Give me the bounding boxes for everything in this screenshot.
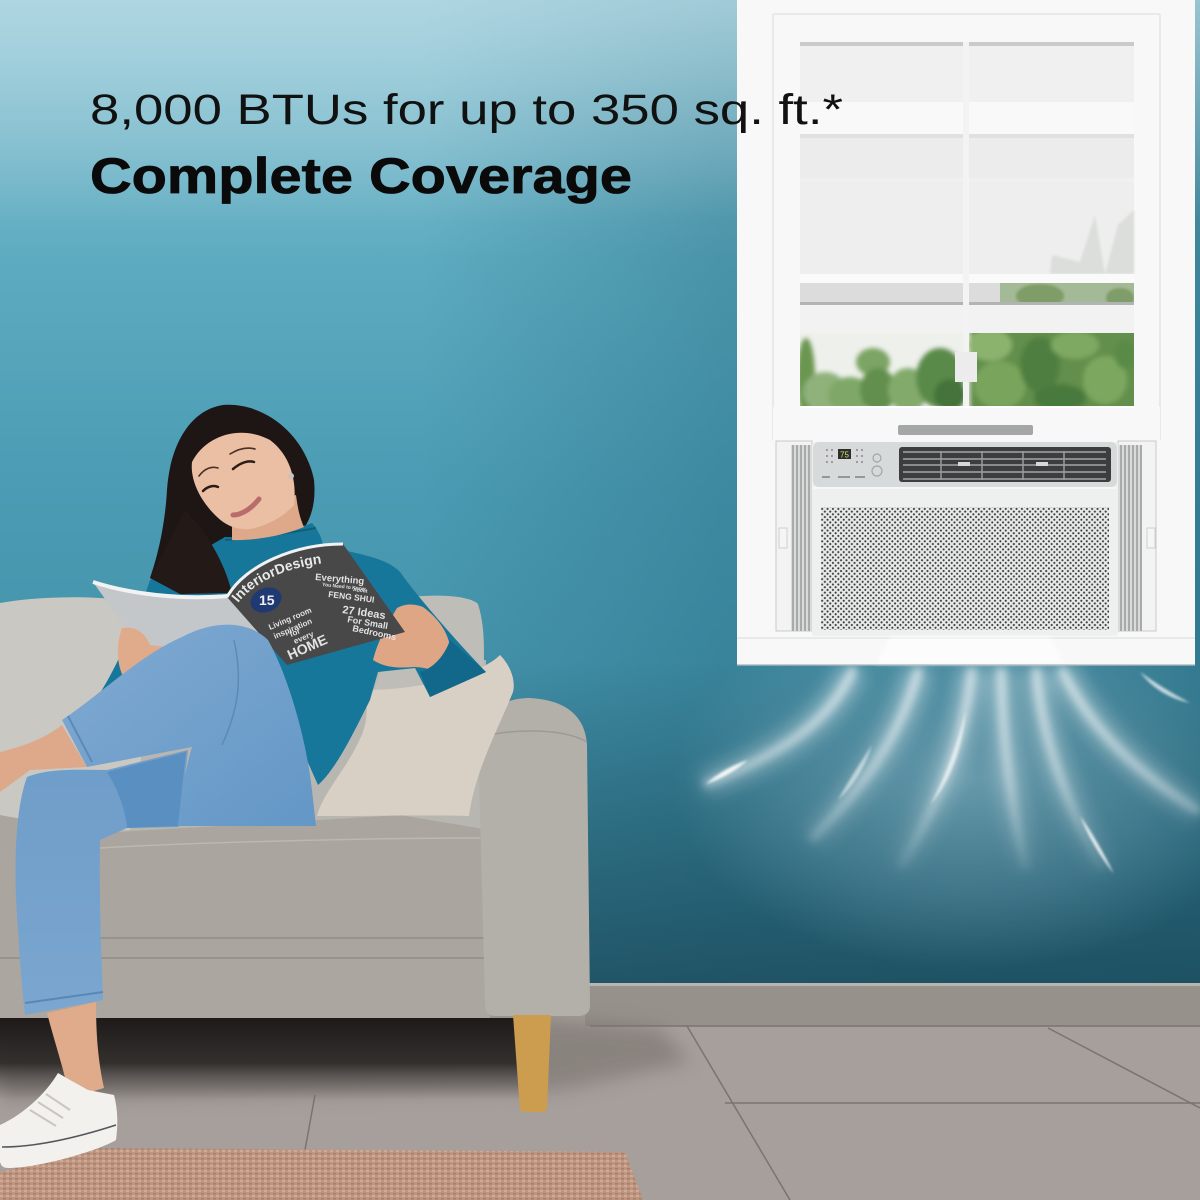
window muntin <box>963 42 969 407</box>
raised leg jeans <box>62 625 316 826</box>
sofa seat cushion <box>0 815 490 957</box>
hair over shoulder <box>150 510 232 594</box>
raised foot <box>0 725 87 792</box>
narrower air streams <box>704 668 1200 870</box>
magazine feature text: For Small <box>347 614 389 631</box>
window frame <box>737 0 1195 665</box>
AC display: 75 <box>840 450 849 460</box>
floor with baseboard and tiles <box>0 983 1200 1200</box>
magazine feature text: Bedrooms <box>352 623 397 642</box>
magazine home feature: HOME <box>285 631 330 663</box>
hair <box>150 405 315 595</box>
lower ankle <box>47 1002 104 1098</box>
face <box>192 433 295 529</box>
airflow from the air conditioner <box>704 668 1200 874</box>
sofa base <box>0 950 490 1018</box>
magazine home feature: Living room <box>267 606 313 632</box>
magazine back cover <box>93 582 290 648</box>
sofa back cushion left <box>0 597 150 830</box>
right hand <box>373 604 450 670</box>
neck <box>232 495 304 540</box>
rug <box>0 1148 643 1200</box>
magazine home feature: inspiration <box>272 617 314 641</box>
AC display <box>822 449 865 477</box>
magazine badge: 15 <box>259 592 275 608</box>
sweater torso and sleeves <box>92 523 486 785</box>
magazine badge <box>247 583 285 617</box>
AC body <box>812 442 1118 636</box>
window <box>737 0 1195 666</box>
AC buttons <box>872 454 882 476</box>
throw pillow <box>317 655 514 816</box>
lower leg jeans <box>15 750 188 1015</box>
headline: complete coverage: Complete Coverage <box>90 148 632 204</box>
magazine feature text: You Need to Know <box>322 582 366 593</box>
magazine feature text <box>315 572 397 642</box>
magazine home feature: for <box>288 626 302 639</box>
earring <box>288 473 294 479</box>
sofa leg <box>513 1015 551 1112</box>
sash handle <box>898 425 1033 435</box>
air conditioner <box>812 442 1118 636</box>
left side panel <box>776 441 812 631</box>
magazine home feature <box>267 606 330 663</box>
sneaker <box>0 1073 117 1168</box>
magazine feature text: About <box>353 587 368 595</box>
magazine feature text: Everything <box>315 572 365 587</box>
window shade <box>800 42 1134 334</box>
window sill <box>773 407 1160 440</box>
AC vent <box>899 447 1111 482</box>
AC top control band <box>813 442 1117 487</box>
magazine feature text: FENG SHUI <box>328 589 375 605</box>
magazine title: InteriorDesign <box>231 556 321 602</box>
AC perforated grille <box>821 507 1109 630</box>
right side panel <box>1118 441 1156 631</box>
light glow on lower sill <box>875 636 1065 664</box>
magazine home feature: every <box>292 629 316 646</box>
sofa back cushion right <box>370 596 484 700</box>
sofa <box>0 596 590 1112</box>
left hand <box>118 628 178 680</box>
headline: capacity statement: 8,000 BTUs for up to 350 sq. ft.* <box>90 86 843 134</box>
right sleeve cuff <box>420 640 486 697</box>
bright air highlights <box>706 672 1190 874</box>
sofa arm <box>478 698 590 1016</box>
magazine cover <box>227 542 405 665</box>
window sash latch <box>955 352 977 382</box>
soft air streams <box>704 668 1200 870</box>
window glass with trees <box>800 333 1134 406</box>
woman reading a magazine <box>0 404 508 1168</box>
eyes and mouth <box>199 448 259 515</box>
sofa backing <box>0 660 486 835</box>
magazine feature text: 27 Ideas <box>342 604 386 622</box>
window trim lines <box>737 14 1195 638</box>
